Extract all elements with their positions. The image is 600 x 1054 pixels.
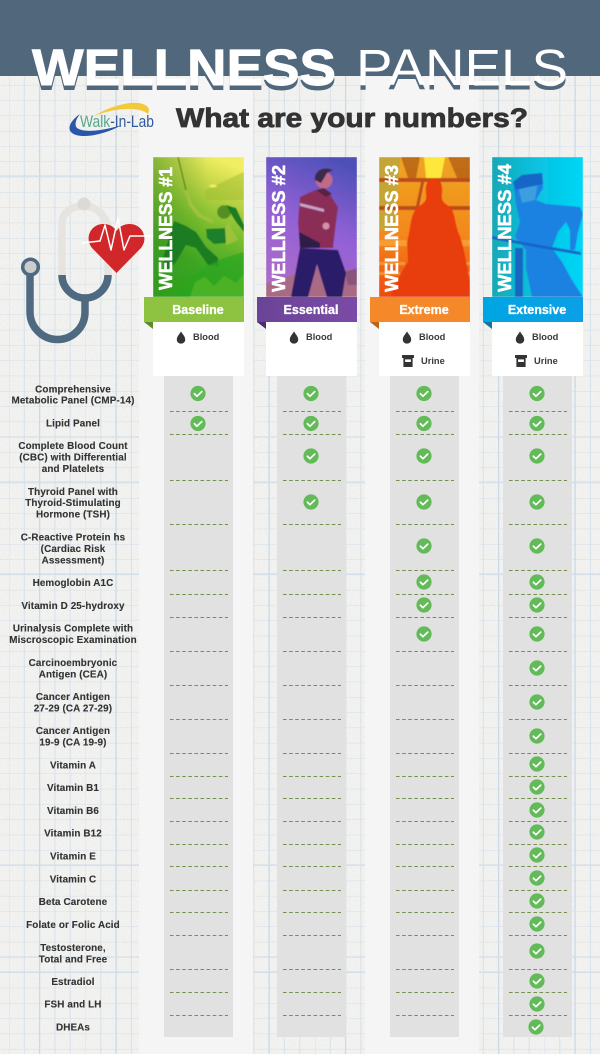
checkmarks: wellness 4: [528, 386, 545, 1035]
title: PANELS: [356, 39, 568, 96]
test names: 27-29 (CA 27-29): [34, 703, 112, 714]
test names: Comprehensive: [35, 384, 111, 396]
sample types: [153, 322, 244, 376]
title: PANELS: [356, 44, 568, 100]
test names: Hemoglobin A1C: [33, 578, 113, 589]
band: Baseline: Baseline: [172, 303, 224, 317]
panel: wellness 2: [257, 157, 357, 376]
panel: wellness 4: [483, 157, 583, 376]
photo: man on dip bars: [492, 157, 583, 297]
test names: Vitamin A: [50, 760, 96, 772]
header band: [0, 0, 600, 76]
checkmarks: wellness 3: [416, 386, 432, 642]
logo: Walk-In-Lab: Walk-In-Lab: [80, 113, 154, 131]
test names: Vitamin C: [50, 874, 96, 885]
sample types: [492, 322, 583, 376]
title: WELLNESS: [32, 44, 336, 100]
band: Essential: [257, 297, 357, 329]
test names: Total and Free: [39, 954, 108, 965]
test names: Vitamin B12: [44, 828, 102, 840]
test names: DHEAs: [56, 1022, 90, 1034]
test names: Hormone (TSH): [36, 510, 110, 521]
photo: meditation: [379, 157, 470, 297]
test names: Beta Carotene: [39, 897, 108, 908]
sample types: [379, 322, 470, 376]
test names: Metabolic Panel (CMP-14): [11, 396, 135, 407]
photo: climber: [153, 157, 244, 297]
test names: Testosterone,: [40, 943, 106, 954]
vertical heading: WELLNESS #2: [269, 165, 289, 292]
pale column strips: [139, 77, 479, 1054]
test names: Carcinoembryonic: [29, 658, 118, 669]
sample types: Blood: [532, 332, 559, 342]
test names: (CBC) with Differential: [19, 453, 127, 464]
test names: Vitamin D 25-hydroxy: [21, 601, 125, 612]
test names: (Cardiac Risk: [41, 544, 106, 555]
test names: Estradiol: [51, 977, 95, 988]
band: Extreme: [370, 297, 470, 329]
panel: wellness 3: [370, 157, 470, 376]
test names: Antigen (CEA): [39, 669, 107, 680]
test names: [9, 384, 137, 1034]
checkmarks: wellness 1: [190, 386, 206, 431]
test names: Lipid Panel: [46, 418, 100, 430]
subtitle: What are your numbers?: [176, 103, 528, 133]
band: Essential: Essential: [284, 303, 338, 317]
checkmarks: wellness 2: [303, 386, 319, 510]
test names: Complete Blood Count: [18, 441, 128, 452]
test names: Assessment): [42, 555, 104, 566]
test names: Cancer Antigen: [36, 726, 110, 737]
comparison columns: [164, 376, 572, 1037]
test names: Cancer Antigen: [36, 692, 110, 703]
test names: 19-9 (CA 19-9): [39, 737, 107, 748]
vertical heading: WELLNESS #4: [495, 164, 515, 292]
photo: runner: [266, 157, 357, 297]
test names: Vitamin B1: [47, 783, 99, 794]
vertical heading: WELLNESS #3: [382, 165, 402, 292]
sample types: [266, 322, 357, 376]
title: WELLNESS: [32, 39, 336, 96]
test names: Thyroid-Stimulating: [25, 498, 121, 509]
sample types: Blood: [419, 332, 446, 342]
band: Extensive: [483, 297, 583, 329]
panel: wellness 1: [144, 157, 244, 376]
icon: stethoscope and heart: [23, 198, 155, 340]
sample types: Urine: [534, 356, 558, 366]
band: Extreme: Extreme: [399, 303, 449, 317]
test names: Miscroscopic Examination: [9, 635, 137, 646]
test names: Thyroid Panel with: [28, 487, 118, 498]
row dividers: [170, 412, 567, 1016]
sample types: Blood: [306, 332, 333, 342]
test names: Urinalysis Complete with: [13, 624, 133, 635]
test names: and Platelets: [42, 464, 105, 475]
test names: C-Reactive Protein hs: [21, 532, 126, 544]
title: [32, 39, 568, 100]
test names: Folate or Folic Acid: [26, 920, 120, 931]
logo: Walk-In-Lab: [69, 103, 154, 136]
vertical heading: WELLNESS #1: [156, 167, 176, 290]
test names: Vitamin B6: [47, 806, 99, 817]
band: Extensive: Extensive: [508, 303, 566, 317]
test names: FSH and LH: [44, 1000, 102, 1010]
band: Baseline: [144, 297, 244, 329]
sample types: Blood: [193, 332, 220, 342]
test names: Vitamin E: [50, 852, 96, 862]
sample types: Urine: [421, 356, 445, 366]
